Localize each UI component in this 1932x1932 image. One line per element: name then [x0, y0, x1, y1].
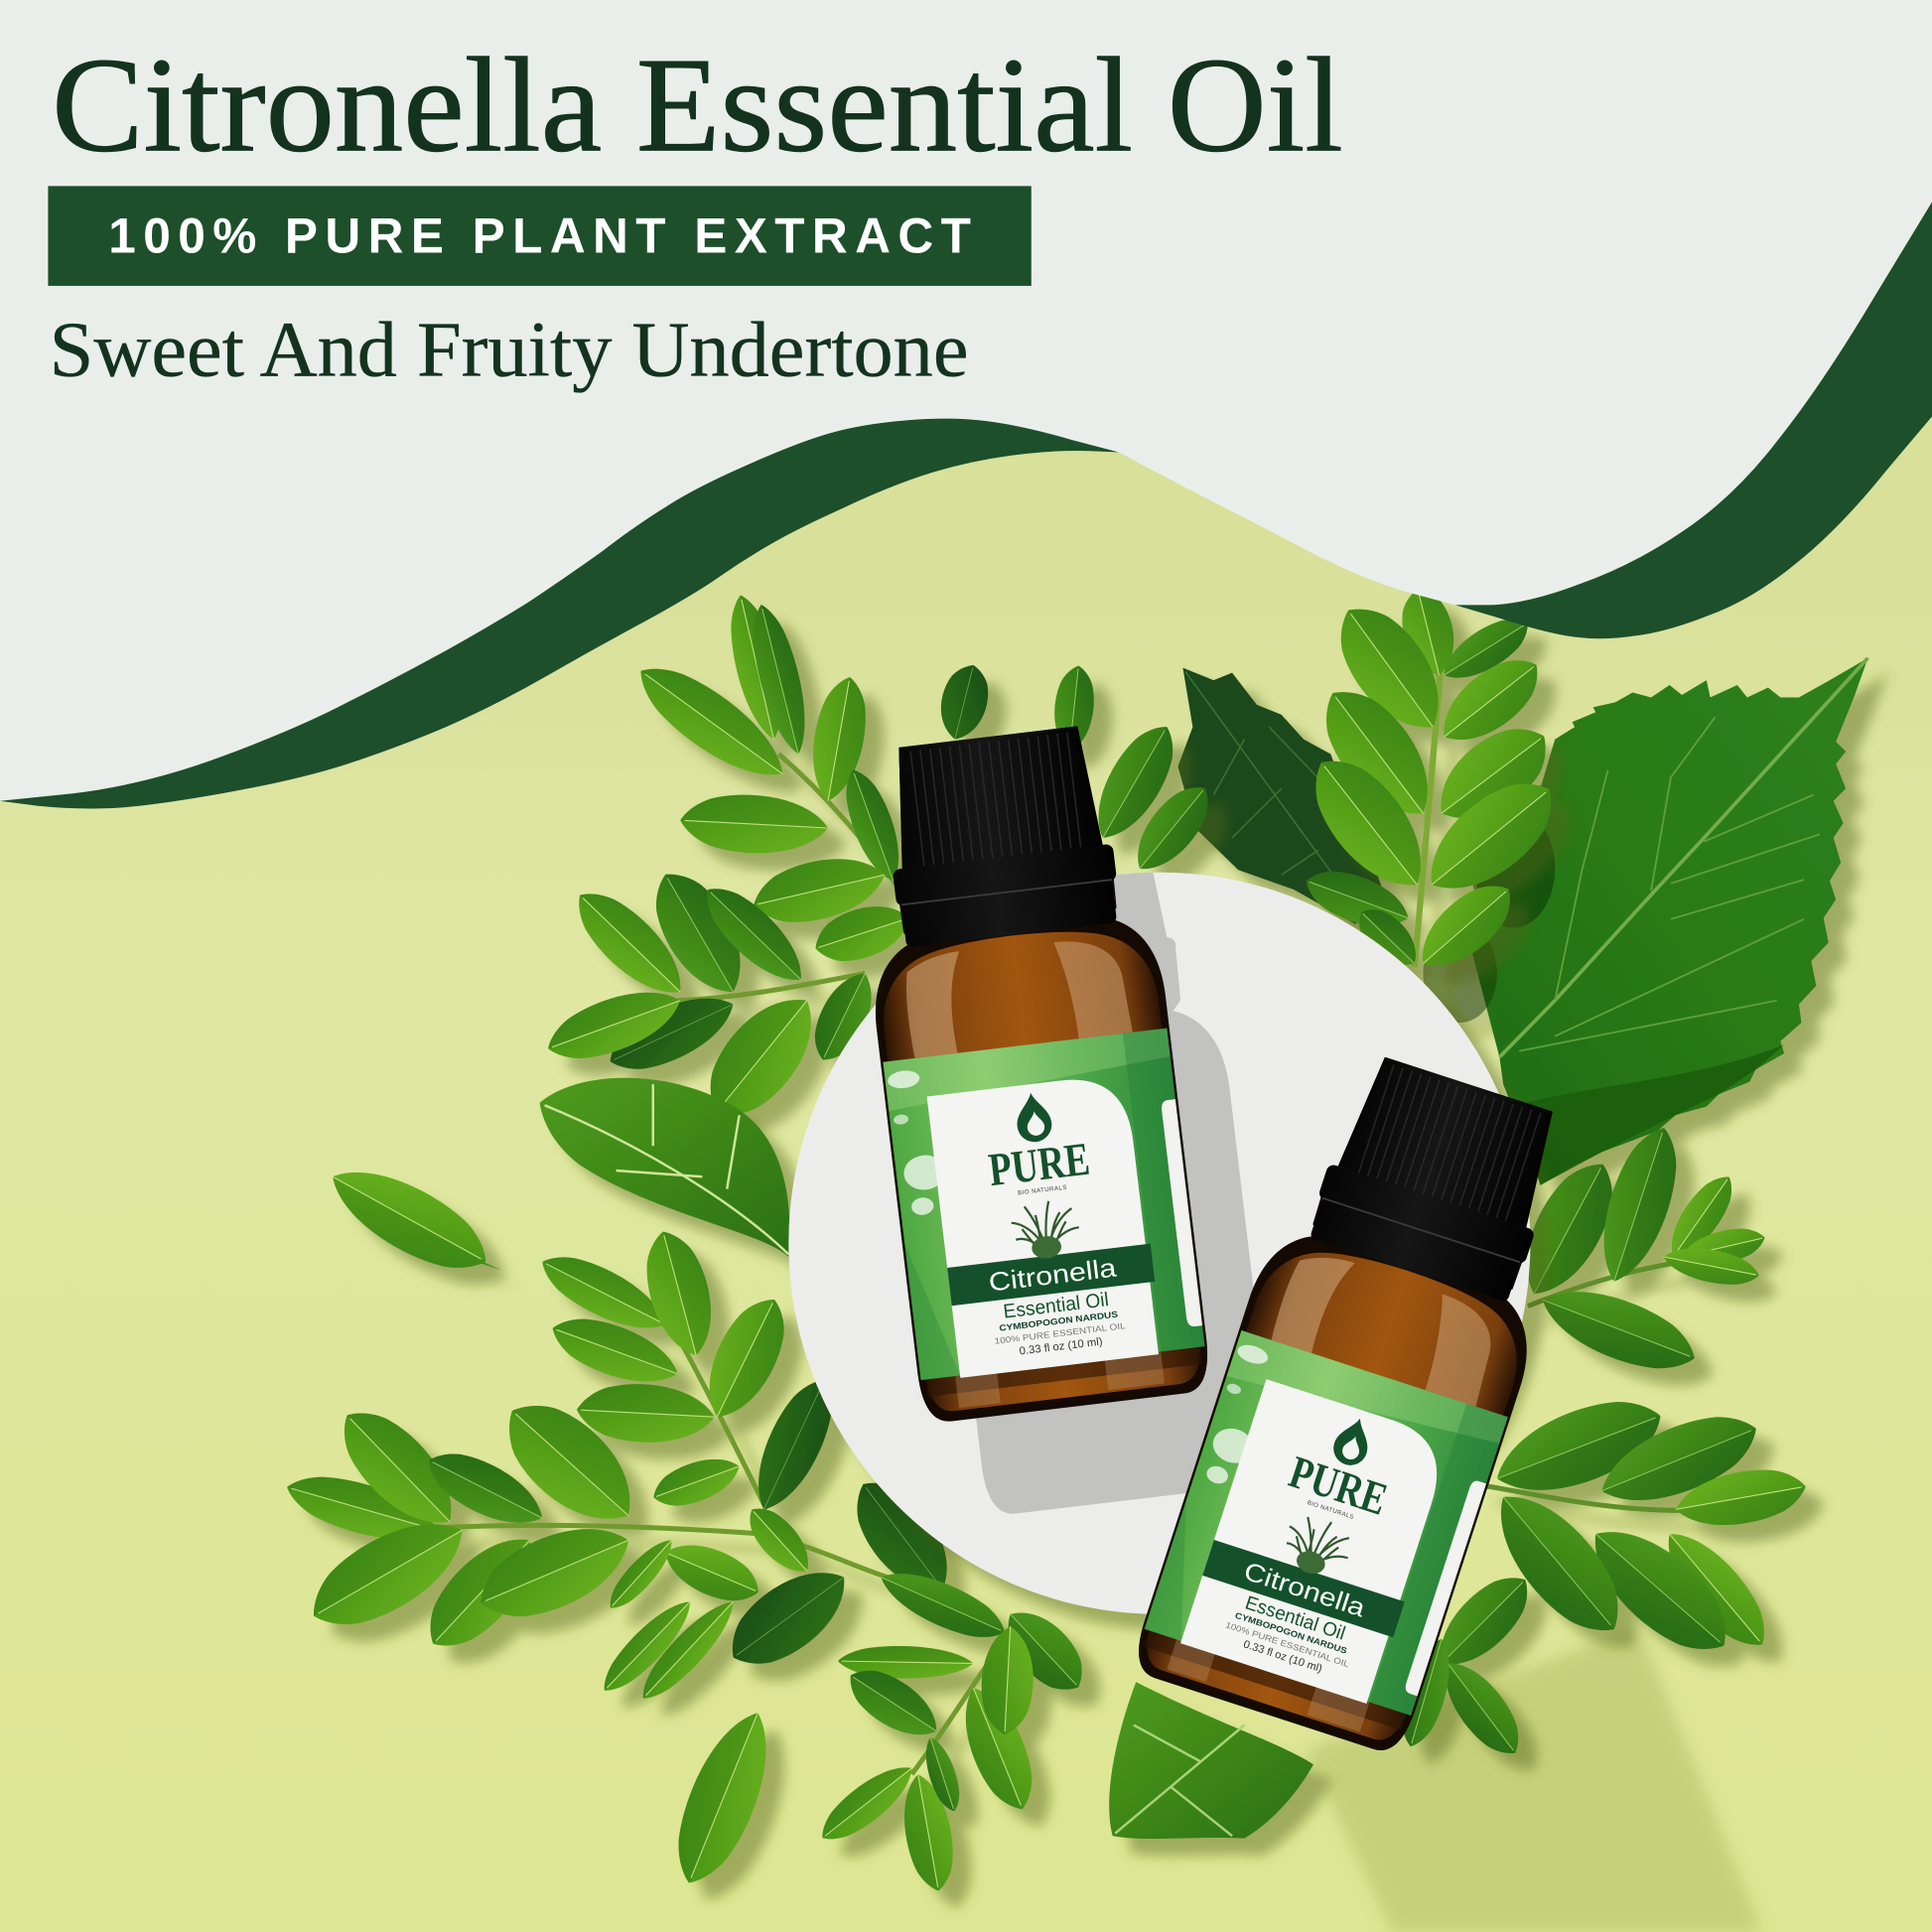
dark green swoosh: right	[1455, 203, 1932, 638]
leaf sprig: bottom	[811, 1596, 1097, 1894]
bottle 1 label text: 100% PURE ESSENTIAL OIL	[994, 1320, 1126, 1346]
pale header wave panel	[0, 0, 1932, 808]
bottle 2 label text	[1220, 1557, 1371, 1683]
bottle 1 plant icon	[1010, 1198, 1082, 1262]
bottle 2 label text: Citronella	[1240, 1558, 1369, 1623]
leaf sprig: upper right	[1294, 583, 1572, 983]
bottle 2 label text: 0.33 fl oz (10 ml)	[1242, 1638, 1323, 1675]
bottle 2: tilted	[1129, 1040, 1604, 1757]
bottle 2 label text: Essential Oil	[1242, 1591, 1348, 1645]
lone leaf, bottom	[659, 1701, 787, 1895]
title: Citronella Essential Oil	[52, 29, 1343, 180]
large right leaf	[1423, 658, 1867, 1185]
bottle 2 label text: CYMBOPOGON NARDUS	[1234, 1610, 1348, 1656]
lone leaf, left	[318, 1150, 501, 1289]
bottle 1: upright	[844, 720, 1212, 1425]
tagline banner	[48, 186, 1032, 286]
small leaves above the bottle	[933, 659, 1222, 883]
bottle 1 label text: Citronella	[987, 1252, 1118, 1298]
bottle 1 label text: CYMBOPOGON NARDUS	[999, 1310, 1119, 1333]
bottle 1 label text: 0.33 fl oz (10 ml)	[1019, 1336, 1103, 1358]
bottle 2 logo and brand	[1283, 1403, 1407, 1529]
subtitle: Sweet And Fruity Undertone	[50, 307, 968, 394]
bottle 1 label text	[986, 1252, 1128, 1360]
bottle 2 logo and brand: PURE	[1284, 1446, 1393, 1525]
leaf sprig: right middle	[1506, 1119, 1768, 1385]
tagline banner: 100% PURE PLANT EXTRACT	[108, 207, 971, 263]
bottle 2 logo and brand: BIO NATURALS	[1307, 1499, 1354, 1521]
leaf sprig: upper left	[539, 591, 917, 1135]
bottle 2 label text: 100% PURE ESSENTIAL OIL	[1224, 1619, 1350, 1669]
dark textured leaf	[1177, 668, 1382, 924]
bottle shadow on plinth	[976, 872, 1253, 1514]
bottle 1 logo and brand: BIO NATURALS	[1018, 1184, 1067, 1197]
bottle 1 logo and brand	[981, 1087, 1093, 1200]
leaf sprig: lower left	[280, 1224, 1014, 1710]
dark green swoosh: left	[0, 419, 1119, 808]
bottle 1 label text: Essential Oil	[1002, 1289, 1110, 1323]
leaf sprig: right lower	[1392, 1383, 1810, 1766]
mint leaf under second bottle	[1109, 1682, 1313, 1839]
mint leaf, middle left	[540, 1078, 789, 1257]
white circular plinth	[788, 812, 1530, 1614]
bottle 1 logo and brand: PURE	[986, 1134, 1092, 1196]
bottle shadow on background, lower right	[1307, 1626, 1762, 1932]
bottle 2 plant icon	[1278, 1510, 1357, 1584]
